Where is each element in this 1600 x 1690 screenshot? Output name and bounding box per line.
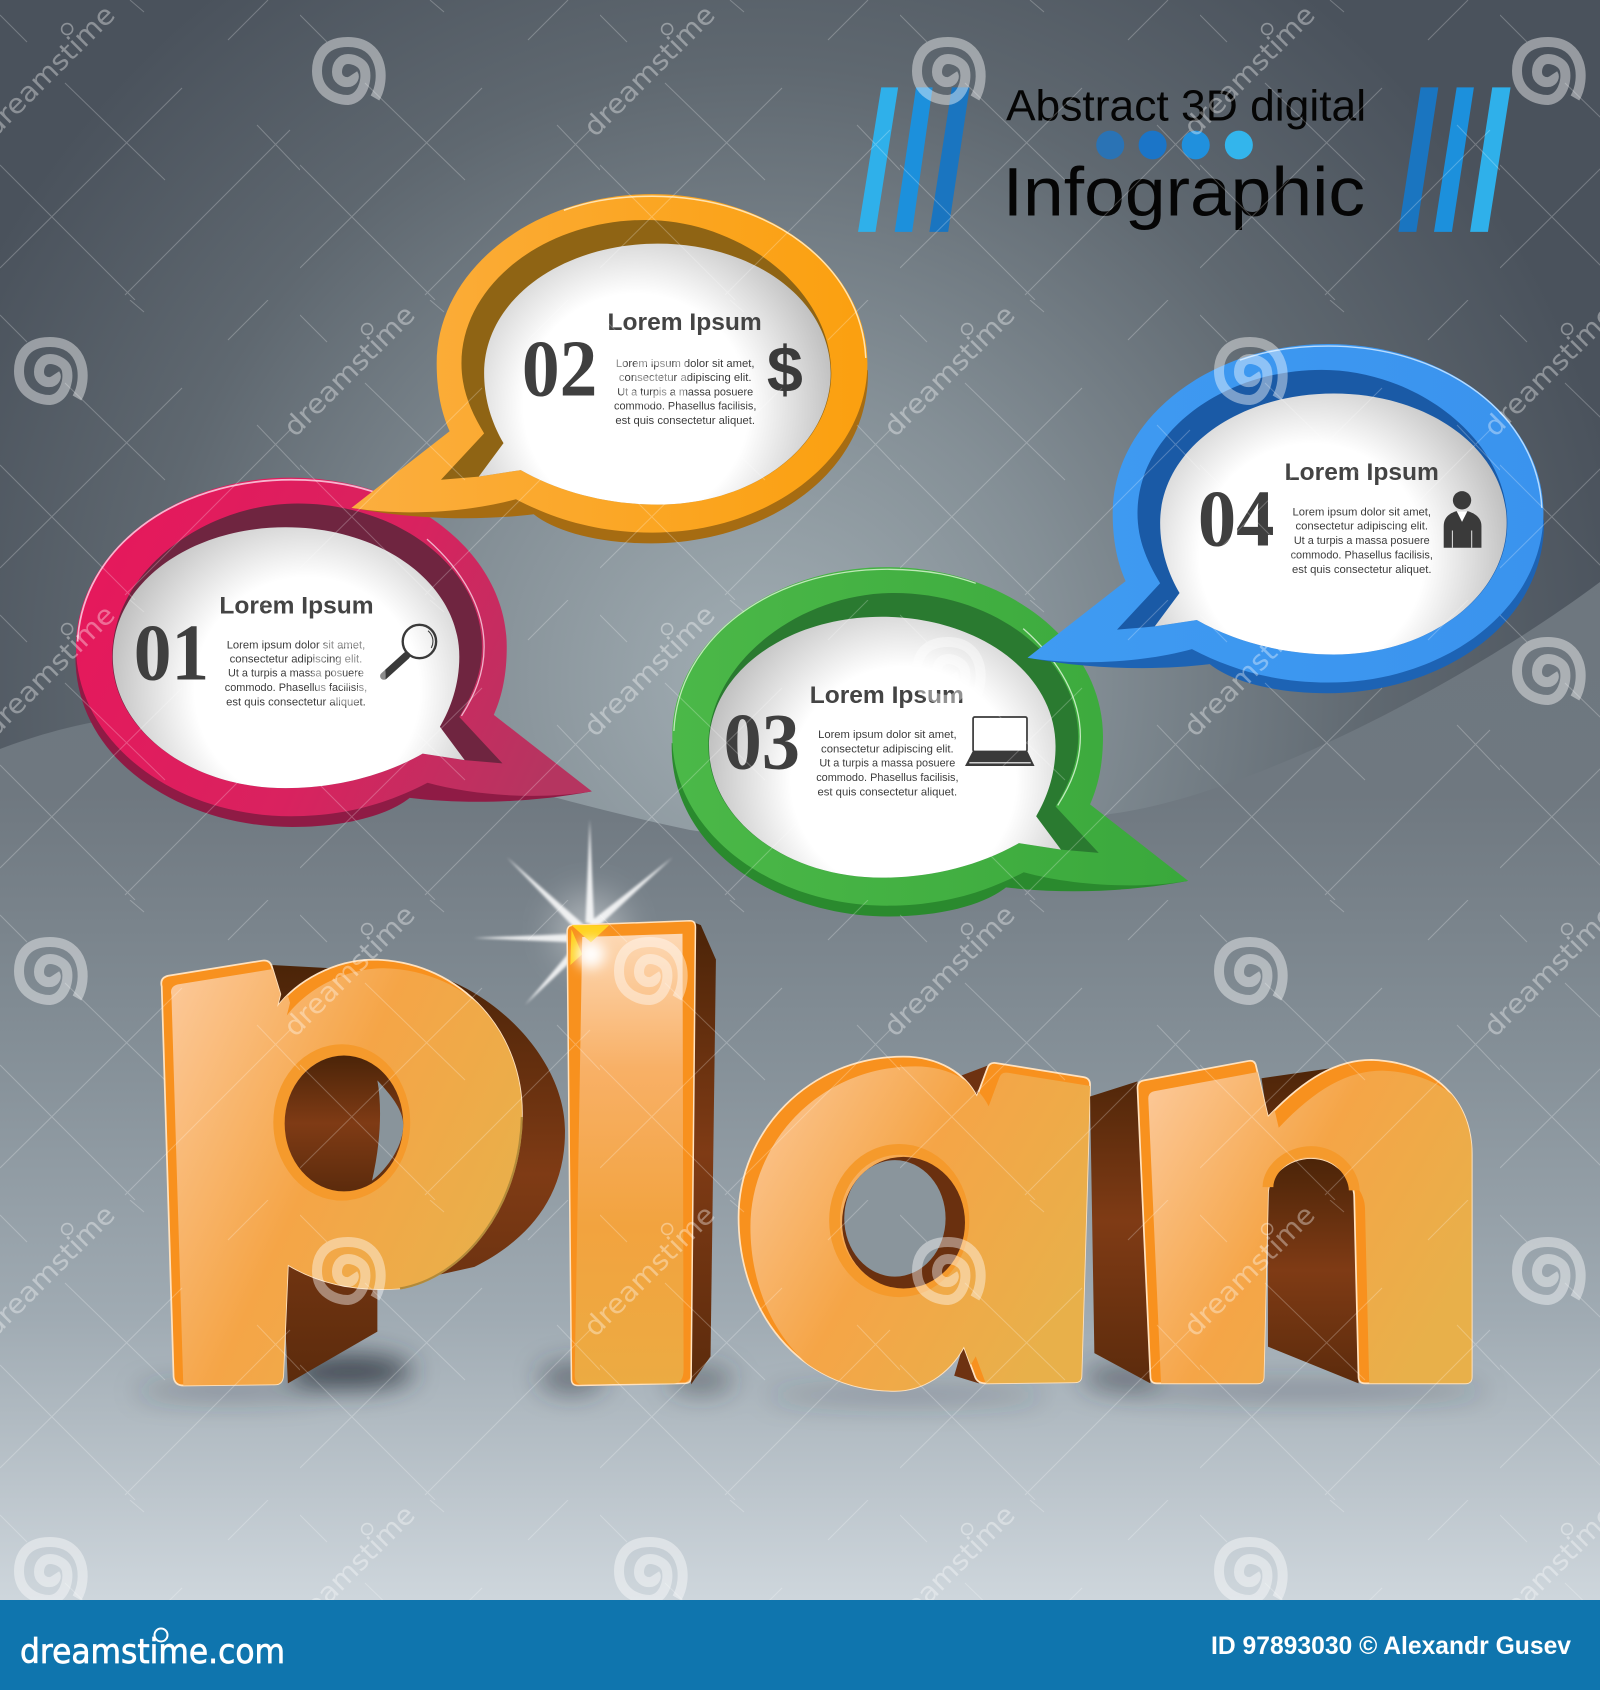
- watermark: dreamstime labels: dreamstime: [578, 0, 722, 143]
- number 02: 02: [522, 325, 597, 414]
- heading 02: Lorem Ipsum: [608, 310, 762, 336]
- footer bar: [0, 1600, 1600, 1690]
- watermark: dreamstime labels: dreamstime: [578, 1199, 722, 1343]
- body text 03: est quis consectetur aliquet.: [818, 786, 957, 798]
- icon: magnifier: [384, 625, 436, 676]
- letter n: [1090, 1060, 1483, 1394]
- title text: Abstract 3D digital: [1006, 83, 1366, 131]
- sparkle core: [570, 925, 609, 968]
- title text: [1003, 83, 1366, 231]
- body text 04: commodo. Phasellus facilisis,: [1291, 550, 1433, 562]
- footer credit: ID 97893030 © Alexandr Gusev: [1211, 1632, 1571, 1660]
- body text 04: consectetur adipiscing elit.: [1295, 521, 1428, 533]
- letter a: [739, 1057, 1102, 1401]
- body text 04: est quis consectetur aliquet.: [1292, 564, 1432, 576]
- heading 04: Lorem Ipsum: [1285, 460, 1439, 486]
- body text 01: est quis consectetur aliquet.: [226, 697, 366, 709]
- number 01: 01: [134, 608, 209, 697]
- body text 02: Lorem ipsum dolor sit amet,: [616, 358, 754, 370]
- body text 01: consectetur adipiscing elit.: [230, 653, 362, 665]
- watermark: dreamstime labels: dreamstime: [278, 299, 422, 443]
- body text 04: Lorem ipsum dolor sit amet,: [1292, 507, 1431, 519]
- body text 03: [816, 729, 959, 798]
- letter l: [567, 921, 716, 1385]
- title stripes right: [1398, 87, 1511, 232]
- body text 04: [1291, 507, 1433, 576]
- body text 03: consectetur adipiscing elit.: [821, 743, 954, 755]
- icon: dollar: $: [767, 332, 803, 405]
- speech bubble 04: blue: [1028, 344, 1544, 693]
- title dots: [1096, 131, 1253, 159]
- icon: person: [1444, 491, 1481, 548]
- body text 04: Ut a turpis a massa posuere: [1294, 535, 1430, 547]
- sparkle rays: [473, 819, 673, 1005]
- body text 03: Ut a turpis a massa posuere: [819, 758, 955, 770]
- watermark: dreamstime labels: dreamstime: [1178, 599, 1322, 743]
- watermark: dreamstime labels: dreamstime: [278, 1499, 422, 1643]
- letter p: [161, 960, 565, 1394]
- heading 03: Lorem Ipsum: [810, 683, 964, 709]
- title text: Infographic: [1003, 154, 1365, 231]
- speech bubble 01: pink: [75, 478, 592, 827]
- body text 01: Lorem ipsum dolor sit amet,: [227, 639, 365, 651]
- watermark: dreamstime labels: dreamstime: [1178, 0, 1322, 143]
- watermark: dreamstime labels: dreamstime: [878, 1499, 1022, 1643]
- body text 02: est quis consectetur aliquet.: [615, 415, 755, 427]
- body text 01: commodo. Phasellus facilisis,: [225, 682, 367, 694]
- speech bubble 02: orange: [351, 194, 868, 543]
- title stripes left: [858, 87, 970, 232]
- watermark: dreamstime labels: dreamstime: [278, 899, 422, 1043]
- letter shadows: [135, 1354, 1488, 1404]
- body text 01: [225, 639, 367, 709]
- watermark: dreamstime labels: dreamstime: [1178, 1199, 1322, 1343]
- body text 02: Ut a turpis a massa posuere: [617, 386, 753, 398]
- body text 02: consectetur adipiscing elit.: [619, 372, 752, 384]
- watermark: dreamstime labels: dreamstime: [578, 599, 722, 743]
- body text 02: commodo. Phasellus facilisis,: [614, 401, 756, 413]
- heading 01: Lorem Ipsum: [219, 593, 374, 619]
- watermark: dreamstime labels: dreamstime: [878, 299, 1022, 443]
- body text 02: [614, 358, 756, 427]
- number 04: 04: [1198, 475, 1274, 564]
- footer logo: dreamstime.com: [20, 1632, 285, 1672]
- speech bubble 03: green: [672, 567, 1188, 916]
- body text 01: Ut a turpis a massa posuere: [228, 668, 364, 680]
- body text 03: commodo. Phasellus facilisis,: [816, 772, 959, 784]
- body text 03: Lorem ipsum dolor sit amet,: [818, 729, 957, 741]
- number 03: 03: [723, 698, 800, 787]
- word: Plan: [161, 921, 1483, 1401]
- watermark: dreamstime labels: dreamstime: [878, 899, 1022, 1043]
- icon: laptop: [965, 717, 1035, 766]
